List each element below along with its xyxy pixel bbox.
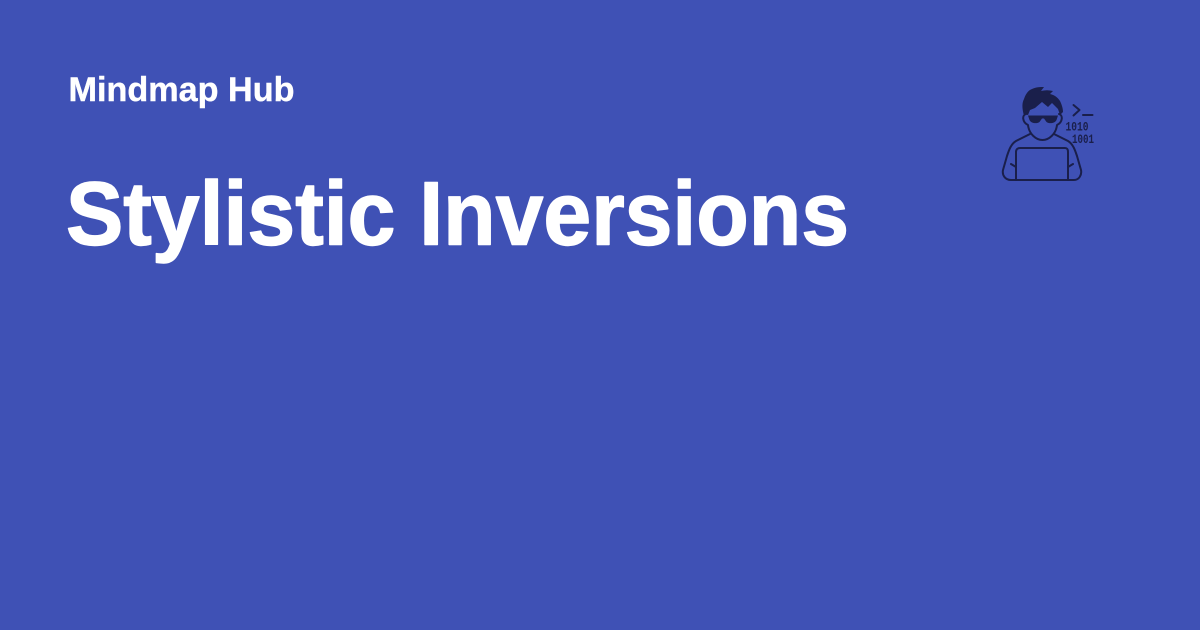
icon: terminal prompt: [1074, 105, 1092, 116]
icon: hair: [1022, 87, 1063, 115]
main title: Stylistic Inversions: [66, 164, 849, 264]
icon: shoulders and arms: [1003, 134, 1081, 180]
icon: binary digits 1001: 1001: [1072, 132, 1094, 147]
icon: binary digits 1010: 1010: [1066, 120, 1089, 134]
icon: elbow marks: [1011, 164, 1073, 167]
icon: face outline: [1023, 114, 1062, 140]
icon: sunglasses: [1028, 116, 1058, 123]
icon: laptop screen: [1016, 148, 1068, 180]
site name heading: Mindmap Hub: [68, 71, 294, 109]
icon: hacker with laptop: [1003, 87, 1092, 180]
